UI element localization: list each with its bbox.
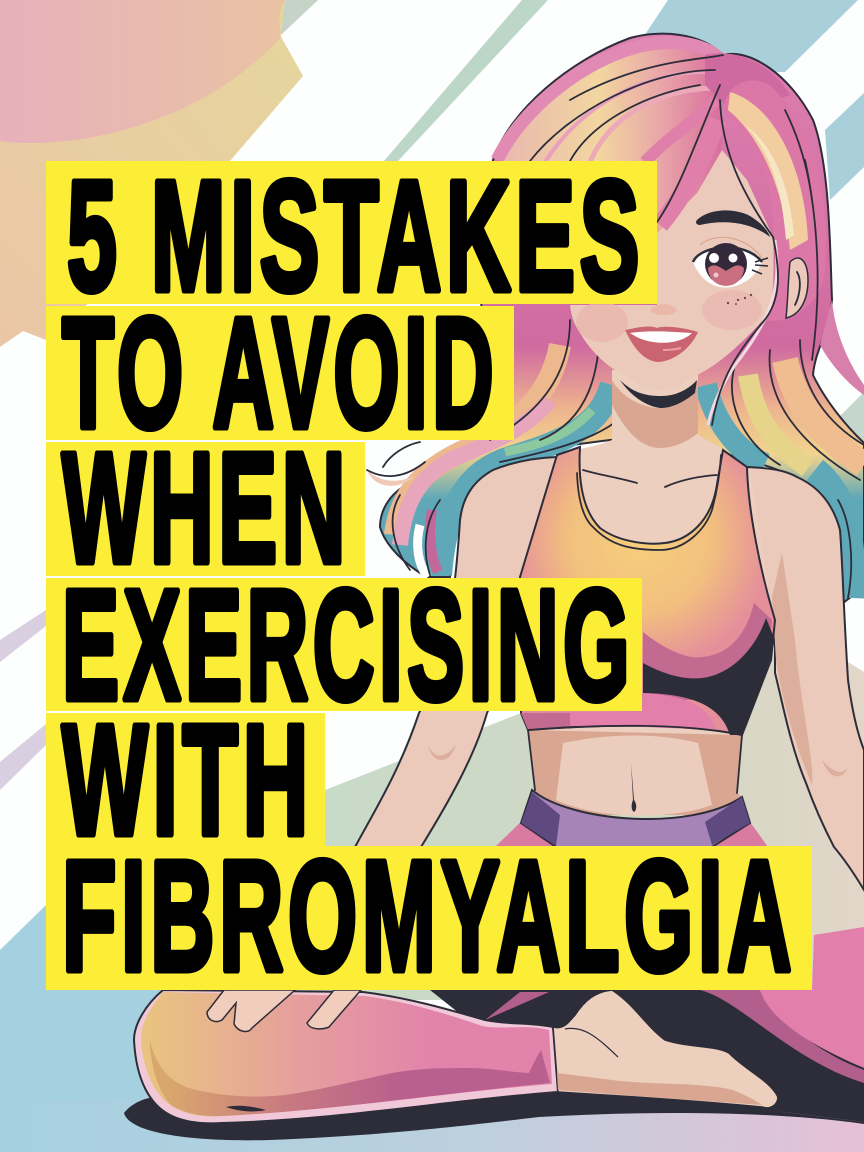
title strip 5: WITH [62,693,313,868]
wisps [820,300,864,395]
title strip 3 [46,421,365,596]
character: waistband and hips [495,790,768,847]
character: back hair [380,34,864,603]
character: front leg [134,990,558,1123]
character: crop top [520,447,775,735]
character: arms [355,457,864,890]
character: shadow [124,1090,864,1140]
character: ear [786,258,808,318]
character: hair fringe and crown [497,43,826,425]
title strip 2 [46,286,514,461]
hair colour bands [393,320,864,598]
character: hand [207,990,361,1031]
character: foot [553,990,778,1108]
title strip 5 [46,693,325,868]
character: lower body dark area and thigh [430,927,864,1122]
title strip 3: WHEN [62,421,350,596]
character: face [570,150,774,390]
title strip 2: TO AVOID [62,286,498,461]
character: neck and torso [528,370,770,816]
hair wisps on the left [367,442,425,486]
